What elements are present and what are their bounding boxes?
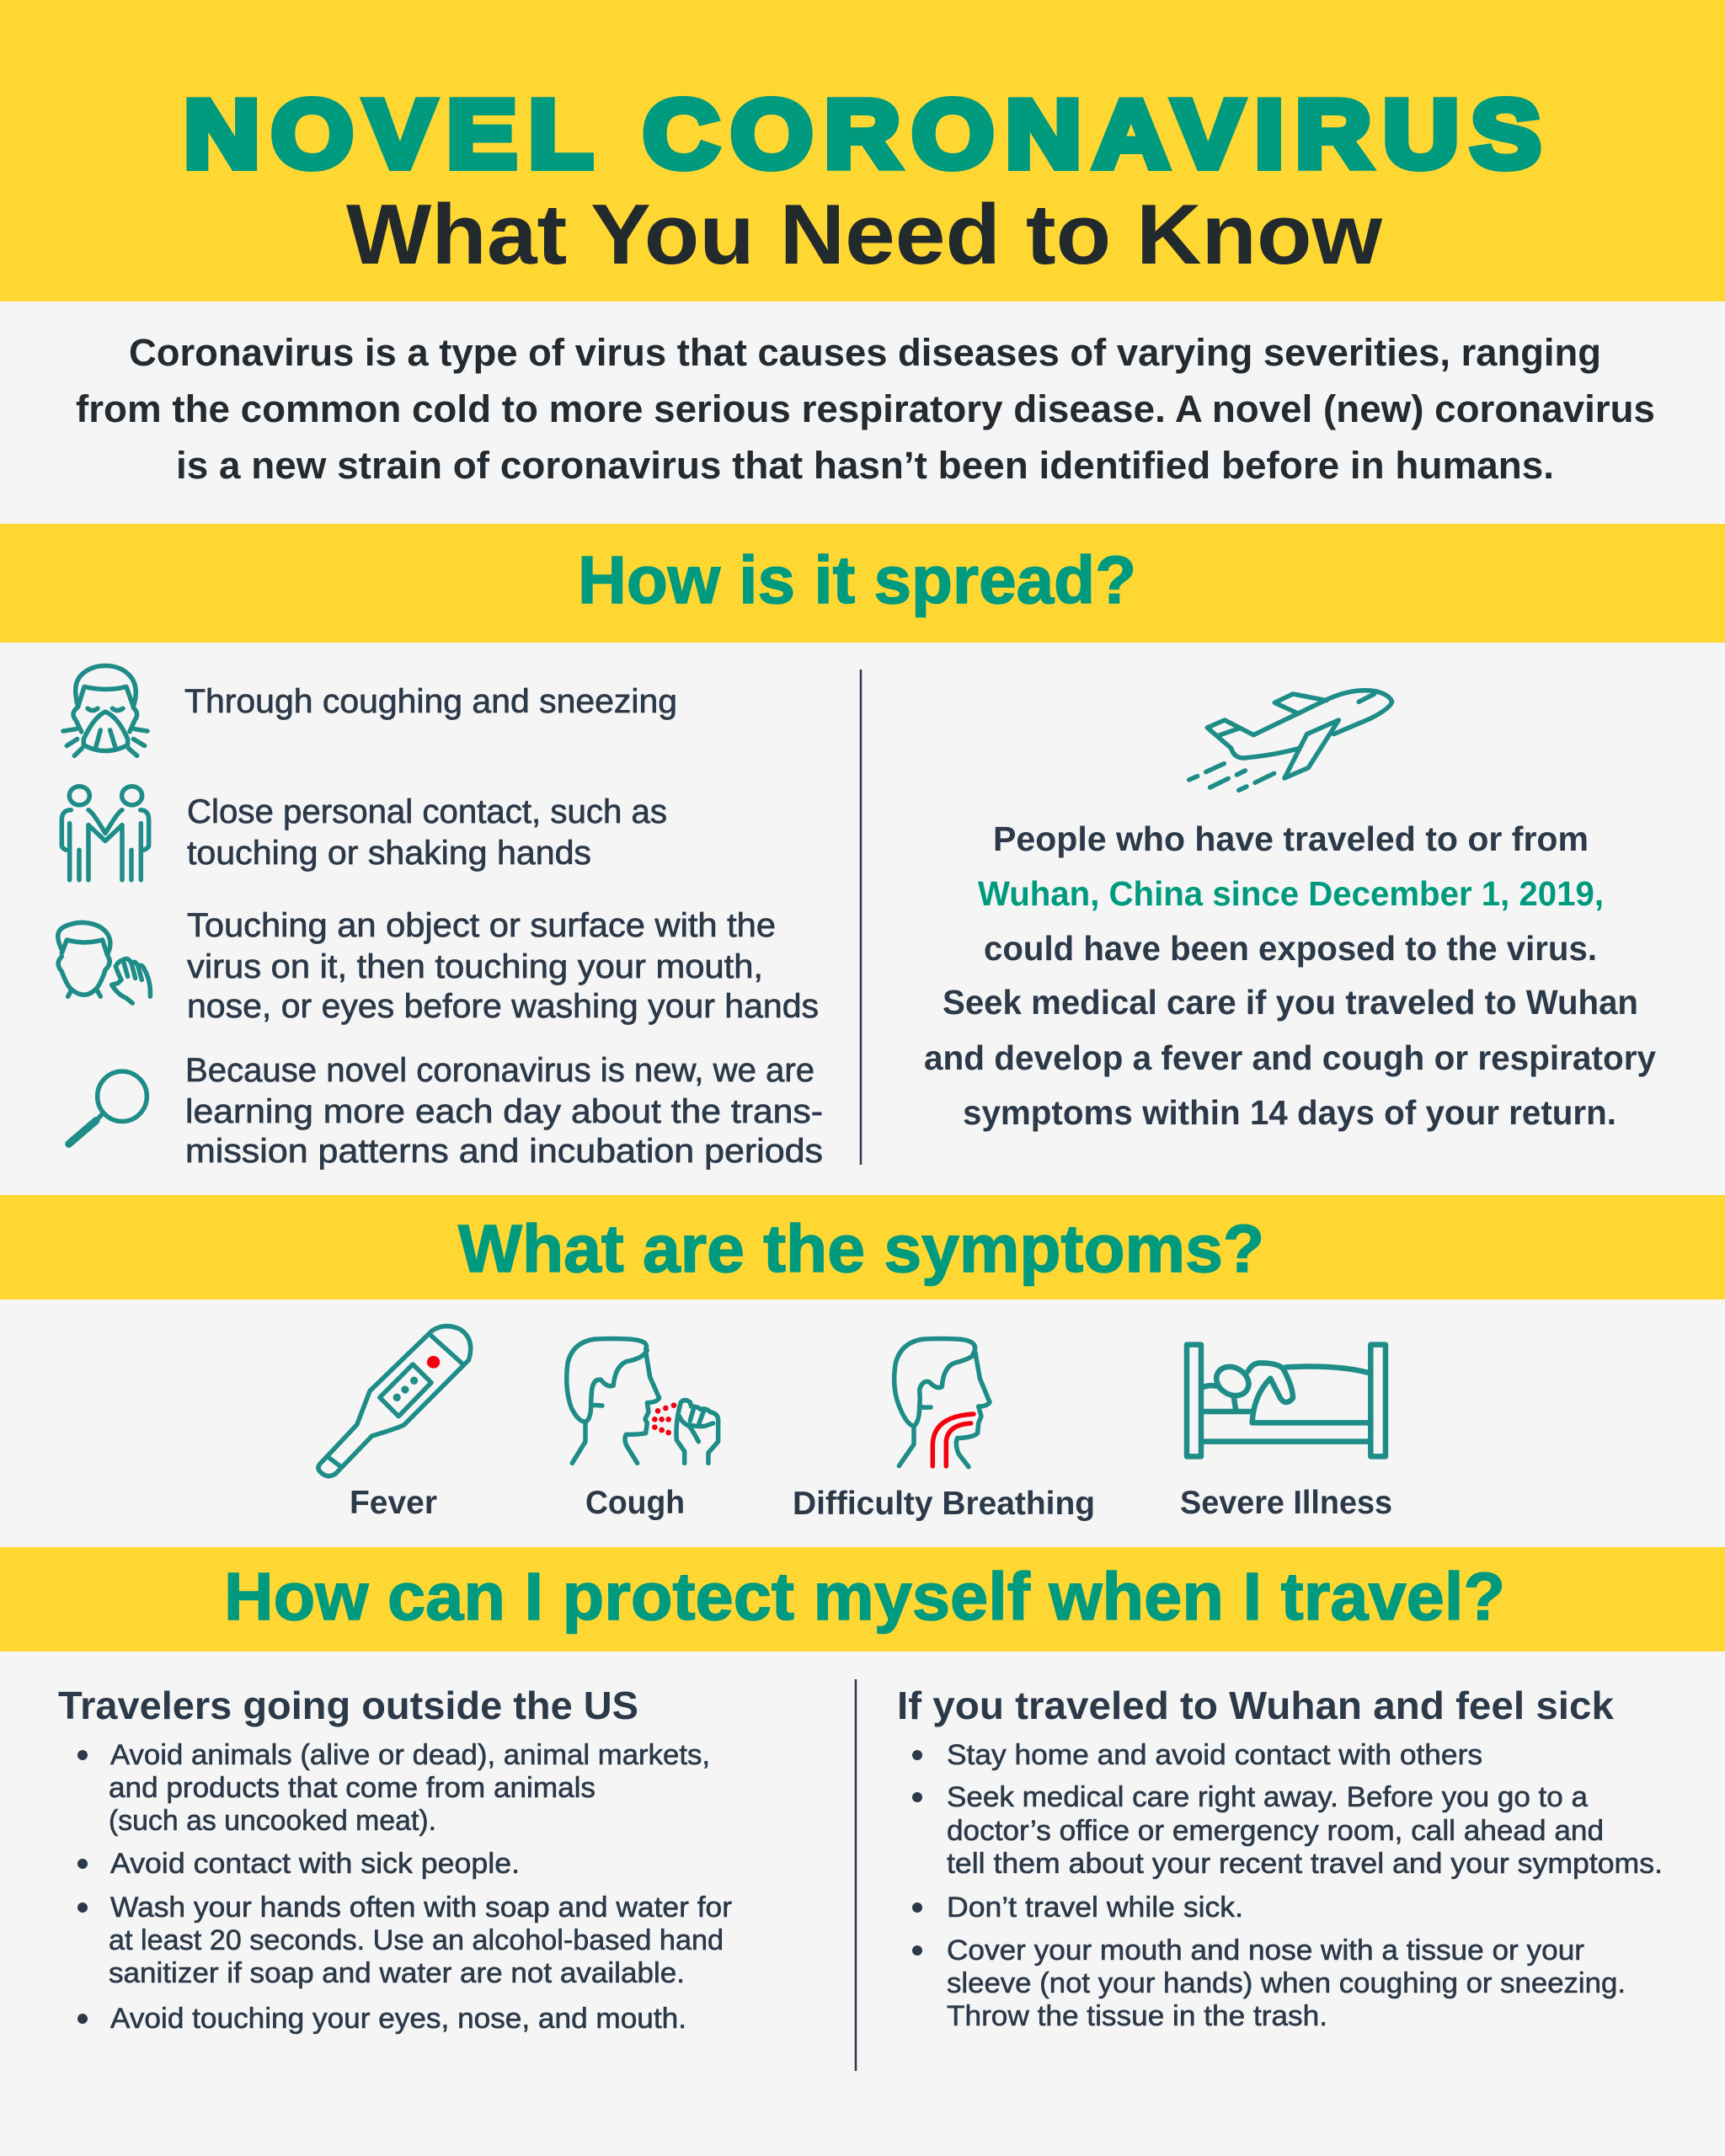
text block: travel exposure: Seek medical care if you traveled to Wuhan: [943, 983, 1638, 1022]
bullet list: Cover your mouth and nose with a tissue or your: [947, 1935, 1584, 1967]
subtitle: What You Need to Know: [346, 188, 1382, 282]
icon: person in bed: [1187, 1345, 1386, 1456]
heading: How can I protect myself: How can I protect myself when I travel?: [224, 1559, 1505, 1634]
panel: travelers going outside the US: [58, 1684, 732, 2035]
text: close personal contact: [187, 793, 667, 872]
text: touching an object: [187, 907, 819, 1025]
text block: introduction: Coronavirus is a type of virus that causes diseases of varying severities, ranging: [129, 331, 1601, 374]
bullet list: at least 20 seconds. Use an alcohol-based hand: [109, 1924, 724, 1956]
text: still learning: [185, 1052, 823, 1170]
bullet list: doctor’s office or emergency room, call ahead and: [947, 1815, 1604, 1847]
icon: airplane: [1189, 691, 1392, 790]
text: still learning: mission patterns and incubation periods: [185, 1133, 823, 1170]
bullet list: Avoid touching your eyes, nose, and mouth.: [110, 2003, 686, 2035]
bullet list: Seek medical care right away. Before you go to a: [947, 1781, 1588, 1813]
text block: travel exposure: could have been exposed to the virus.: [984, 929, 1597, 968]
heading: How is it spread: How is it spread?: [578, 542, 1136, 617]
panel: traveled to Wuhan and feel sick: [897, 1684, 1663, 2032]
icon: magnifying glass: [69, 1071, 147, 1144]
subheading: Travelers going outside the US: [58, 1684, 638, 1727]
text: close personal contact: touching or shaking hands: [187, 835, 591, 872]
text: still learning: Because novel coronavirus is new, we are: [185, 1052, 814, 1089]
icon: thermometer: [318, 1326, 471, 1476]
bullet list: (such as uncooked meat).: [109, 1805, 436, 1837]
bullet list: Don’t travel while sick.: [947, 1892, 1243, 1924]
bullet list: Throw the tissue in the trash.: [947, 2000, 1327, 2032]
heading: What are the symptoms: What are the symptoms?: [458, 1211, 1264, 1286]
subheading: If you traveled to Wuhan and feel sick: [897, 1684, 1614, 1727]
heading: How can I protect myself: [0, 1547, 1725, 1652]
text block: travel exposure: Wuhan, China since December 1, 2019,: [978, 874, 1604, 913]
text: coughing and sneezing: Through coughing and sneezing: [184, 683, 677, 720]
title: Novel Coronavirus: NOVEL CORONAVIRUS: [184, 82, 1541, 188]
bullet list: tell them about your recent travel and your symptoms.: [947, 1848, 1663, 1880]
icon: person coughing: [567, 1338, 718, 1463]
label: severe illness: Severe Illness: [1180, 1485, 1392, 1521]
bullet list: Avoid animals (alive or dead), animal markets,: [110, 1739, 710, 1771]
text: touching an object: virus on it, then touching your mouth,: [187, 948, 763, 985]
icon: airway, difficulty breathing: [895, 1338, 990, 1467]
text: still learning: learning more each day about the trans-: [185, 1093, 823, 1130]
bullet list: sleeve (not your hands) when coughing or sneezing.: [947, 1967, 1626, 1999]
text block: introduction: [76, 331, 1655, 487]
text block: travel exposure: symptoms within 14 days of your return.: [963, 1093, 1616, 1132]
label: difficulty breathing: Difficulty Breathing: [793, 1486, 1095, 1522]
icon: person sneezing into mask: [63, 665, 147, 755]
heading: How is it spread: [0, 524, 1725, 643]
text: close personal contact: Close personal contact, such as: [187, 793, 667, 830]
panel: title banner: [0, 0, 1725, 302]
bullet list: sanitizer if soap and water are not available.: [109, 1957, 685, 1989]
text: touching an object: nose, or eyes before washing your hands: [187, 988, 819, 1025]
label: cough: Cough: [585, 1485, 685, 1521]
text block: travel exposure: [924, 819, 1656, 1132]
bullet list: and products that come from animals: [109, 1772, 595, 1804]
text block: introduction: from the common cold to more serious respiratory disease. A novel (new) coronavirus: [76, 387, 1655, 430]
bullet list: [912, 1739, 1663, 2032]
text block: introduction: is a new strain of coronavirus that hasn’t been identified before in humans.: [176, 444, 1554, 487]
bullet list: Stay home and avoid contact with others: [947, 1739, 1482, 1771]
bullet list: Avoid contact with sick people.: [110, 1848, 520, 1880]
icon: face and hand: [58, 923, 150, 1003]
label: fever: Fever: [350, 1485, 437, 1521]
bullet list: [77, 1739, 732, 2035]
bullet list: Wash your hands often with soap and water for: [110, 1892, 732, 1924]
icon: two people shaking hands: [61, 787, 149, 880]
text: touching an object: Touching an object or surface with the: [187, 907, 776, 944]
heading: What are the symptoms: [0, 1195, 1725, 1299]
text block: travel exposure: and develop a fever and cough or respiratory: [924, 1038, 1656, 1077]
text block: travel exposure: People who have traveled to or from: [993, 819, 1589, 858]
